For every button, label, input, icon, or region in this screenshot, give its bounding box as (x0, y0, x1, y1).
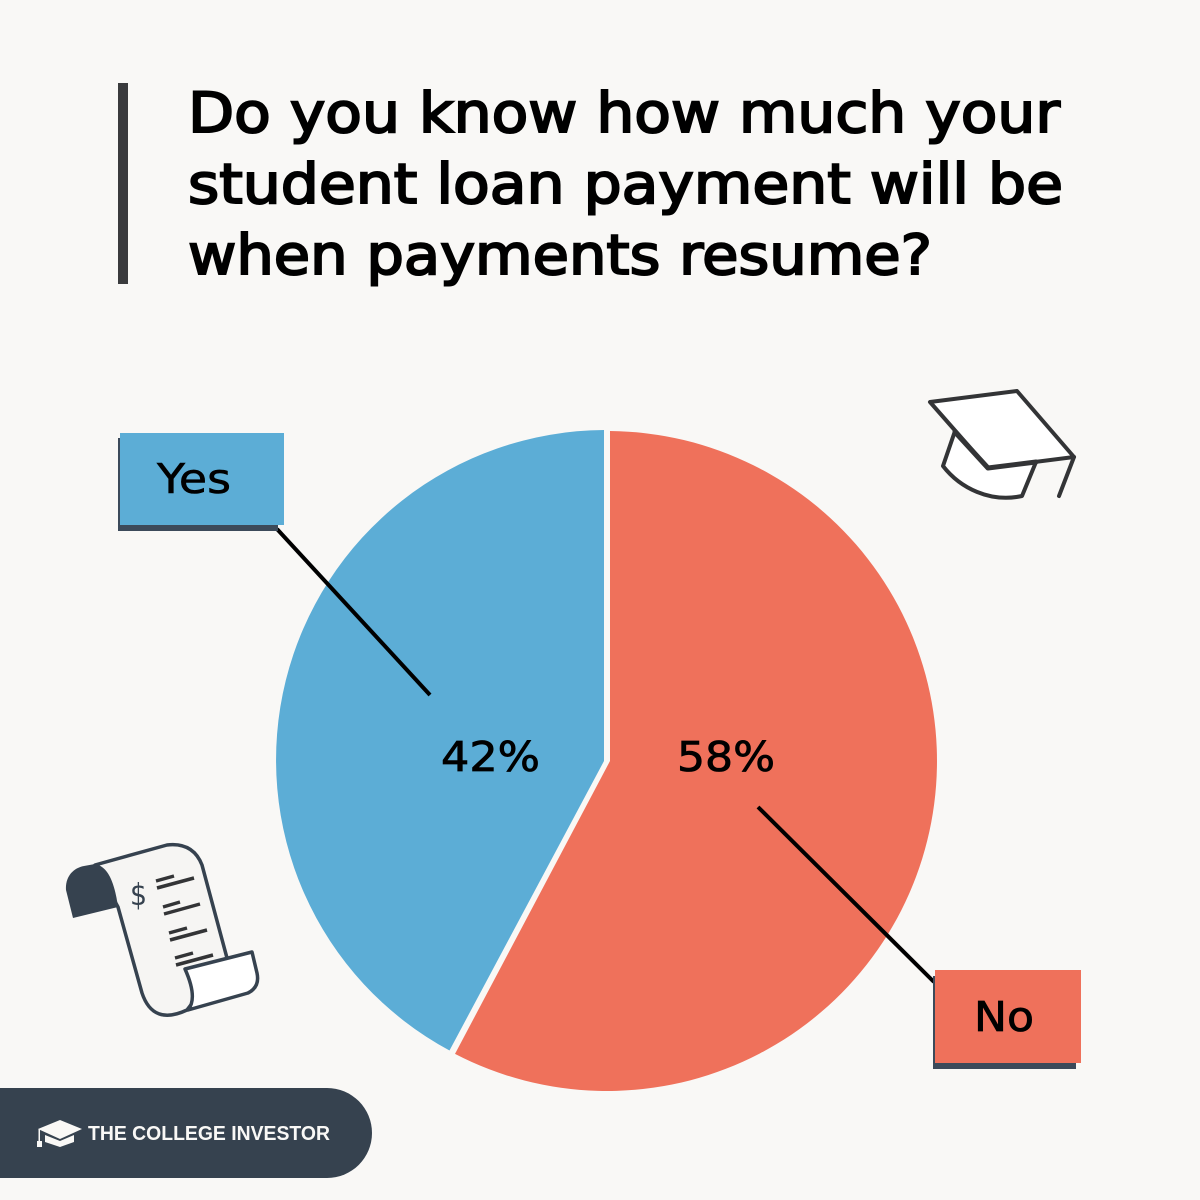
title: when payments resume? (188, 223, 932, 287)
receipt lines (156, 876, 213, 965)
callout: No: No (974, 993, 1034, 1041)
callout: Yes (118, 433, 284, 531)
pie slice: Yes 42% (276, 430, 604, 1050)
dollar sign: $ (130, 878, 147, 913)
title: Do you know how much your (188, 81, 1060, 145)
value label: 58%: 58% (677, 733, 775, 781)
icon: graduation cap (930, 391, 1074, 498)
title (188, 81, 1063, 287)
pie slice: No 58% (455, 431, 937, 1091)
callout: Yes: Yes (156, 455, 231, 503)
leader line: No (758, 807, 934, 982)
icon: receipt (66, 845, 258, 1015)
pie chart (276, 430, 937, 1091)
callout: No (933, 970, 1081, 1069)
value label: 42%: 42% (441, 733, 540, 781)
brand name: THE COLLEGE INVESTOR (88, 1123, 331, 1145)
leader line: Yes (277, 529, 430, 695)
footer brand badge (0, 1088, 372, 1178)
title accent bar (118, 83, 128, 284)
logo: mortarboard (37, 1120, 82, 1147)
title: student loan payment will be (188, 152, 1063, 216)
